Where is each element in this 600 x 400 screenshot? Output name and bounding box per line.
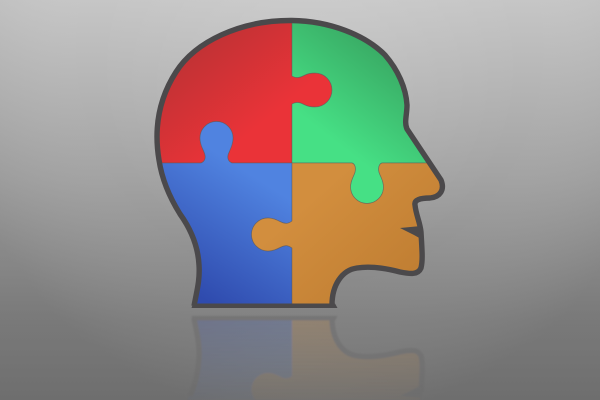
mouth notch and neck base <box>192 226 423 308</box>
puzzle head <box>150 15 445 310</box>
reflection of head <box>192 316 419 376</box>
puzzle piece: blue <box>162 121 292 304</box>
puzzle piece: orange <box>252 163 445 310</box>
head outline <box>157 20 442 306</box>
puzzle piece: red <box>160 23 332 163</box>
puzzle piece: green <box>292 23 426 204</box>
